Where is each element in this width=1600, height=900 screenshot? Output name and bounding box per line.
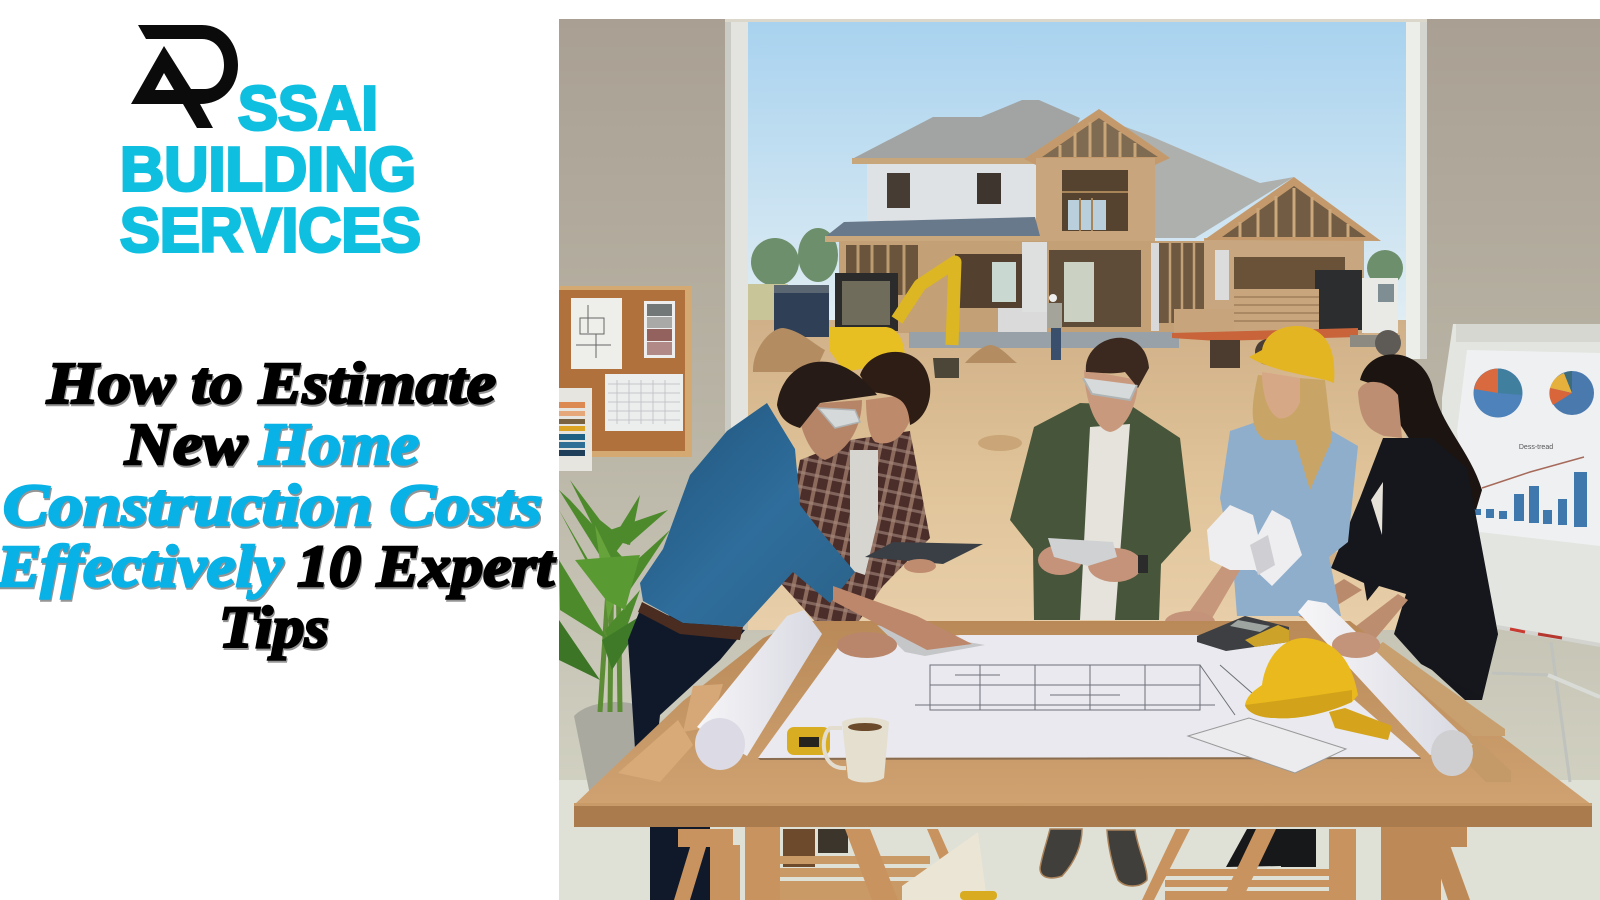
slats xyxy=(780,856,930,900)
person: man in plaid shirt xyxy=(777,352,983,634)
left blueprint roll xyxy=(695,610,822,770)
blueprint plan lines xyxy=(915,665,1260,715)
blazer xyxy=(1331,438,1498,697)
curly hair xyxy=(860,352,930,425)
dump truck xyxy=(774,285,829,337)
papers on table xyxy=(1188,718,1346,773)
upper roof xyxy=(852,100,1080,159)
calculator xyxy=(1197,616,1289,651)
title: Effectively xyxy=(0,533,284,599)
title: How to Estimate xyxy=(46,350,496,416)
watch xyxy=(1138,555,1148,573)
sawhorse legs centre xyxy=(845,829,950,900)
olive-jacket man's shoes xyxy=(1040,829,1147,886)
person: man in blue shirt xyxy=(628,362,877,900)
door opening xyxy=(1049,250,1141,327)
t-shirt xyxy=(850,450,878,575)
side framing xyxy=(1159,243,1205,323)
excavator xyxy=(829,262,959,378)
logo word: BUILDING: BUILDING xyxy=(120,136,416,204)
whiteboard with charts xyxy=(1442,324,1600,782)
upper windows xyxy=(887,173,910,208)
dark block xyxy=(783,829,815,867)
paper and hard hat on floor xyxy=(902,832,997,900)
garage block xyxy=(1204,238,1364,334)
hand on roll xyxy=(1332,632,1380,658)
flatbed truck with lumber xyxy=(1172,270,1401,368)
pie chart 1 xyxy=(1474,368,1522,418)
right sawhorse xyxy=(1381,827,1470,900)
blue-shirt man lower leg xyxy=(650,827,710,900)
title: 10 Expert xyxy=(297,533,556,599)
person: woman in black blazer xyxy=(1291,354,1498,700)
hair xyxy=(1360,354,1482,510)
blue shirt man's arm xyxy=(833,586,972,650)
person: man in olive jacket xyxy=(1010,338,1191,620)
white 3D model xyxy=(1207,505,1302,586)
plaid-shirt man's legs xyxy=(818,829,848,853)
garage gable xyxy=(1204,177,1381,241)
resting hand xyxy=(837,632,897,658)
forearm xyxy=(1185,555,1243,625)
porch roof xyxy=(825,217,1040,237)
shirt xyxy=(777,431,930,634)
sky xyxy=(748,20,1406,320)
shirt xyxy=(1220,418,1358,616)
interior walls xyxy=(559,19,1600,900)
person: woman with hard hat xyxy=(1165,326,1358,633)
title xyxy=(0,350,556,660)
marker tray xyxy=(1497,627,1600,645)
jacket xyxy=(1010,403,1191,620)
roof fascia xyxy=(852,158,1042,164)
under table: sawhorses, legs and shoes xyxy=(650,827,1470,900)
dirt piles xyxy=(753,328,1370,568)
hard hat on table xyxy=(1245,638,1358,718)
left sawhorse xyxy=(674,827,780,900)
hair xyxy=(1253,375,1332,490)
table edge xyxy=(574,805,1592,827)
logo word: SERVICES: SERVICES xyxy=(120,196,421,266)
right-centre sawhorse xyxy=(1142,829,1356,900)
plant leaves xyxy=(559,480,670,680)
woman's boots xyxy=(1226,829,1316,867)
coffee mug xyxy=(824,718,889,782)
chart sheet xyxy=(1457,350,1600,546)
window frame xyxy=(725,19,1427,433)
worker xyxy=(1048,294,1062,360)
tape measure left xyxy=(787,727,830,755)
chart title: Dess-tread xyxy=(1519,444,1553,451)
face xyxy=(797,400,862,460)
icon: AR monogram xyxy=(131,25,238,128)
title: Construction Costs xyxy=(3,472,542,538)
goggles xyxy=(1083,378,1137,400)
pie chart 2 xyxy=(1549,371,1594,415)
hand xyxy=(904,559,936,573)
shirt xyxy=(640,403,855,627)
title: New xyxy=(124,411,248,477)
white upper wall xyxy=(867,164,1037,221)
blouse xyxy=(1371,482,1383,535)
calendar xyxy=(605,374,683,431)
arms xyxy=(1291,579,1362,622)
concrete wall section xyxy=(998,308,1047,334)
hair xyxy=(1086,338,1149,388)
potted plant xyxy=(559,480,670,795)
tablet xyxy=(1048,538,1117,566)
easel legs xyxy=(1492,642,1600,782)
wood offcut xyxy=(618,684,723,782)
colour swatches xyxy=(644,301,675,358)
foundation xyxy=(909,332,1179,348)
table top xyxy=(574,621,1592,805)
plant pot xyxy=(574,702,647,795)
title: Home xyxy=(258,411,419,477)
belt xyxy=(638,602,743,640)
cork board xyxy=(559,286,692,471)
hard hat xyxy=(1249,326,1334,383)
plant stems xyxy=(600,540,620,712)
right main roof xyxy=(1120,125,1294,238)
tape measure right xyxy=(1329,708,1392,740)
logo: Assai Building Services xyxy=(120,25,421,266)
first floor wall xyxy=(839,241,1209,333)
bar chart xyxy=(1472,472,1587,527)
right wood planks xyxy=(1372,642,1511,782)
ground xyxy=(748,284,788,324)
small tablet on table xyxy=(877,625,985,656)
logo word: SSAI: SSAI xyxy=(238,74,378,144)
hair xyxy=(777,362,877,428)
tablet xyxy=(865,542,983,564)
blueprint sheet xyxy=(758,635,1421,760)
photo illustration: team reviewing plans with house under construction xyxy=(559,19,1600,900)
face xyxy=(866,395,910,443)
central osb wall xyxy=(1036,158,1155,242)
house under construction xyxy=(825,100,1381,348)
t-shirt xyxy=(1080,424,1130,620)
trousers xyxy=(628,610,745,900)
goggles xyxy=(818,408,860,428)
trousers xyxy=(1421,634,1498,700)
right blueprint roll xyxy=(1298,600,1473,776)
face xyxy=(1358,382,1402,438)
swatch sheet xyxy=(559,388,592,471)
face xyxy=(1084,370,1138,432)
table xyxy=(574,586,1592,827)
central gable xyxy=(1024,109,1170,165)
trees xyxy=(751,228,1403,286)
window view: construction site xyxy=(748,20,1406,630)
pinned floor plan xyxy=(571,298,622,369)
hands xyxy=(1038,545,1082,575)
face xyxy=(1262,372,1300,418)
title: Tips xyxy=(219,594,329,660)
trend line xyxy=(1482,457,1584,488)
